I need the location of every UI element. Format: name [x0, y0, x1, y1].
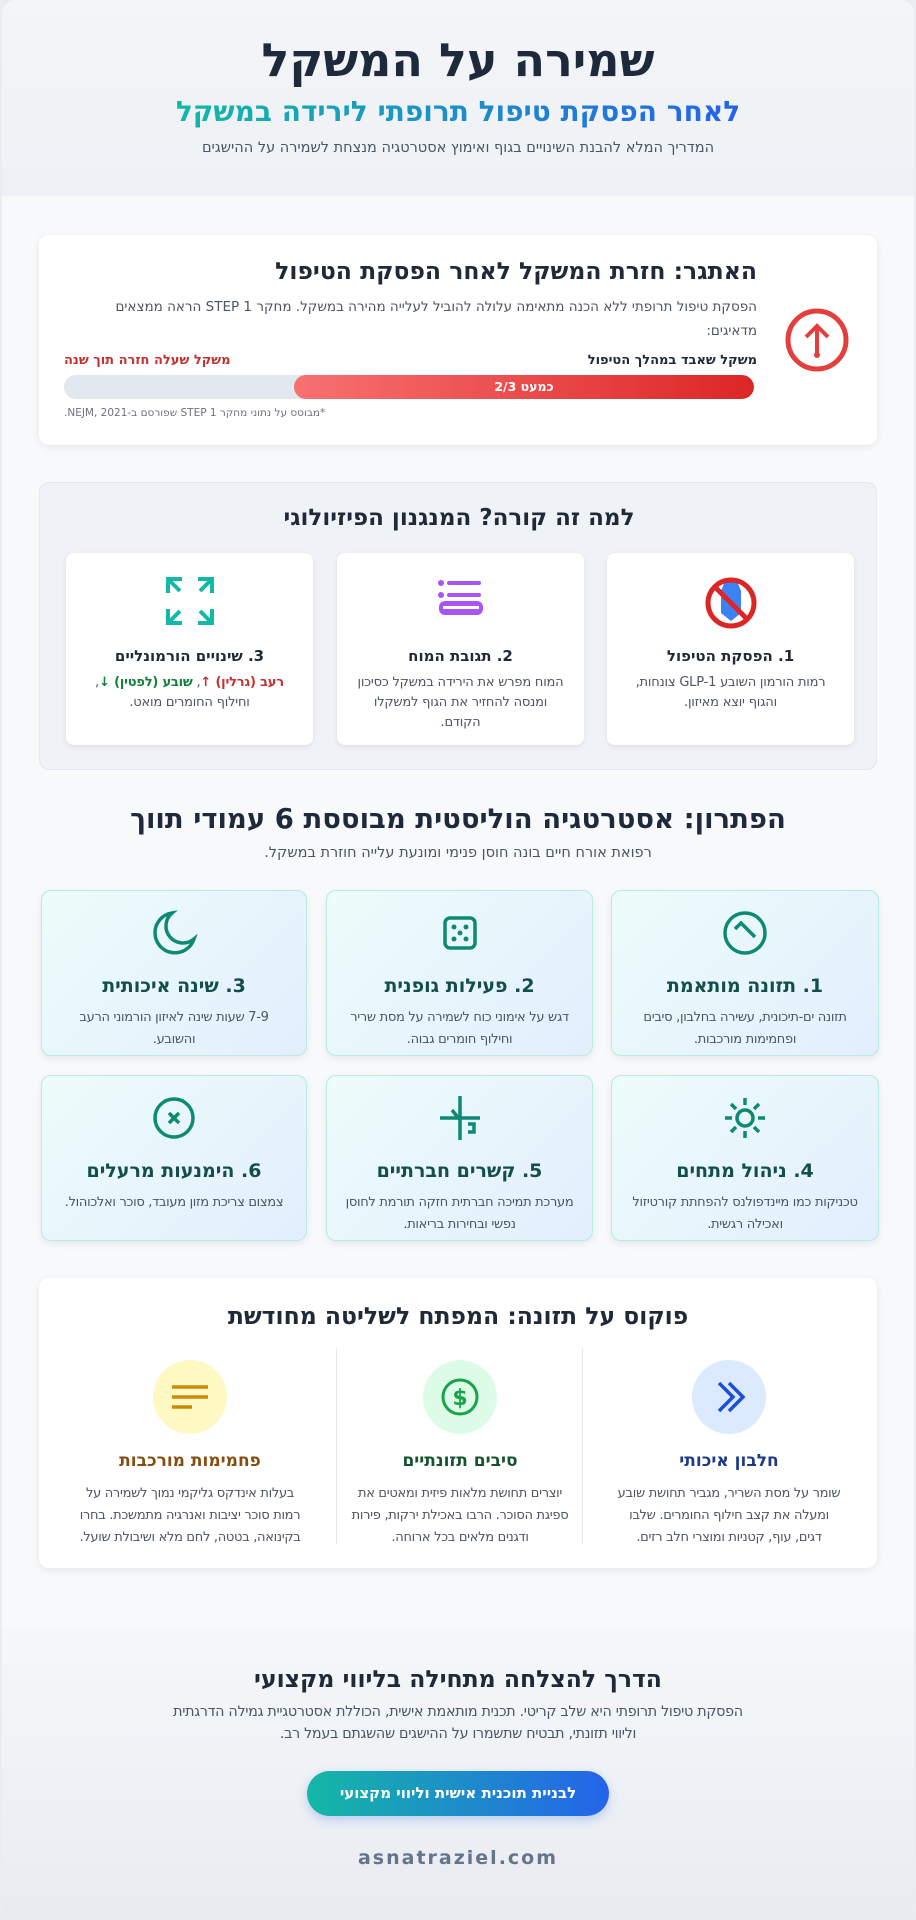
icon: sun — [725, 1098, 765, 1138]
bar labels: משקל שאבד במהלך הטיפול — [588, 353, 757, 368]
card: stop treatment: והגוף יוצא מאיזון. — [684, 695, 777, 710]
column: protein: חלבון איכותי — [679, 1451, 779, 1471]
domain: asnatraziel.com — [358, 1847, 558, 1869]
progress bar — [64, 375, 754, 399]
column: fiber: ודגנים מלאים בכל ארוחה. — [391, 1530, 529, 1545]
column: carbs — [79, 1360, 301, 1545]
card: hormonal changes: וחילוף החומרים מואט. — [129, 695, 250, 710]
pillar 5: מערכת תמיכה חברתית חזקה תורמת לחוסן — [346, 1195, 573, 1210]
icon: cross — [440, 1096, 480, 1140]
footer heading: הדרך להצלחה מתחילה בליווי מקצועי — [254, 1665, 662, 1693]
pillar 3: 3. שינה איכותית — [102, 975, 246, 997]
icon: moon — [153, 910, 198, 954]
header description: המדריך המלא להבנת השינויים בגוף ואימוץ אסטרטגיה מנצחת לשמירה על ההישגים — [202, 140, 714, 156]
pillar 1: ופחמימות מורכבות. — [694, 1032, 796, 1047]
subtitle: לאחר הפסקת טיפול תרופתי לירידה במשקל — [176, 95, 740, 128]
challenge text: הפסקת טיפול תרופתי ללא הכנה מתאימה עלולה להוביל לעלייה מהירה במשקל. מחקר STEP 1 הראה ממצאים מדאיגים: — [115, 299, 757, 339]
column: protein: ומעלה את קצב חילוף החומרים. שלבו — [629, 1508, 829, 1523]
column: carbs: בעלות אינדקס גליקמי נמוך לשמירה על — [86, 1486, 294, 1501]
pillar 2 — [326, 890, 593, 1056]
progress bar: כמעט 2/3 — [494, 379, 554, 394]
card: stop treatment: 1. הפסקת הטיפול — [667, 647, 794, 665]
pillar 5: 5. קשרים חברתיים — [377, 1160, 542, 1182]
pillar 1 — [611, 890, 879, 1056]
icon: list — [438, 580, 483, 615]
panel: mechanism — [39, 482, 877, 770]
card: hormonal changes — [66, 553, 313, 745]
icon: lines — [153, 1360, 227, 1434]
icon: dice — [443, 916, 477, 950]
pillar 4: 4. ניהול מתחים — [676, 1160, 814, 1182]
icon: dollar — [423, 1360, 497, 1434]
column: fiber — [352, 1360, 568, 1545]
card: brain response: הקודם. — [441, 715, 480, 730]
icon: x circle — [153, 1097, 195, 1139]
title: שמירה על המשקל — [262, 33, 654, 87]
pillar 6: 6. הימנעות מרעלים — [86, 1160, 262, 1182]
panel: challenge — [39, 235, 877, 445]
pillar 4 — [611, 1075, 879, 1241]
pillar 3 — [41, 890, 307, 1056]
pillar 2: וחילוף חומרים גבוה. — [407, 1032, 512, 1047]
column: fiber: יוצרים תחושת מלאות פיזית ומאטים את — [358, 1486, 562, 1501]
panel: challenge: משקל שעלה חזרה תוך שנה — [64, 353, 231, 368]
card: brain response: 2. תגובת המוח — [408, 647, 513, 665]
footnote: *מבוסס על נתוני מחקר STEP 1 שפורסם ב-NEJM, 2021. — [64, 407, 325, 419]
column: fiber: סיבים תזונתיים — [402, 1451, 518, 1471]
column: protein: דגים, עוף, קטניות ומוצרי חלב רזים. — [636, 1530, 822, 1545]
solution subtitle: רפואת אורח חיים בונה חוסן פנימי ומונעת עלייה חוזרת במשקל. — [264, 845, 652, 861]
pillar 4: טכניקות כמו מיינדפולנס להפחתת קורטיזול — [632, 1195, 858, 1210]
column: protein: שומר על מסת השריר, מגביר תחושת שובע — [618, 1486, 840, 1501]
card: hormonal changes: רעב (גרלין) ↑, שובע (לפטין) ↓, — [95, 675, 284, 690]
icon: dollar: $ — [452, 1386, 468, 1411]
mechanism heading: למה זה קורה? המנגנון הפיזיולוגי — [283, 505, 634, 531]
header background — [2, 0, 914, 196]
icon: chevrons — [692, 1360, 766, 1434]
pillar 1: 1. תזונה מותאמת — [667, 975, 823, 997]
column: carbs: רמות סוכר יציבות ואנרגיה מתמשכת. בחרו — [80, 1508, 300, 1523]
footer text: וליווי תזונתי, תבטיח שתשמרו על ההישגים שהשגתם בעמל רב. — [280, 1726, 636, 1742]
footer section — [2, 1629, 914, 1918]
footer text: הפסקת טיפול תרופתי היא שלב קריטי. תכנית מותאמת אישית, הכוללת אסטרטגיית גמילה הדרגתית — [173, 1704, 743, 1720]
challenge heading: האתגר: חזרת המשקל לאחר הפסקת הטיפול — [275, 257, 757, 285]
button — [307, 1771, 609, 1816]
pillar 4: ואכילה רגשית. — [707, 1217, 783, 1232]
column: fiber: ספיגת הסוכר. הרבו באכילת ירקות, פירות — [352, 1508, 568, 1523]
icon: up arrow circle — [786, 308, 848, 372]
panel: nutrition — [39, 1278, 877, 1568]
icon: arrows — [166, 577, 214, 625]
icon: no syringe — [706, 578, 756, 628]
pillar 5 — [326, 1075, 593, 1241]
card: brain response — [337, 553, 584, 745]
pillar 5: נפשי ובחירות בריאות. — [403, 1217, 516, 1232]
pillar 3: והשובע. — [153, 1032, 195, 1047]
pillar 6 — [41, 1075, 307, 1241]
pillar 1: תזונה ים-תיכונית, עשירה בחלבון, סיבים — [643, 1010, 847, 1025]
pillar 2: 2. פעילות גופנית — [384, 975, 535, 997]
card: stop treatment — [607, 553, 854, 745]
pillar 2: דגש על אימוני כוח לשמירה על מסת שריר — [350, 1010, 569, 1025]
solution heading: הפתרון: אסטרטגיה הוליסטית מבוססת 6 עמודי תווך — [130, 803, 786, 835]
card: brain response: ומנסה להחזיר את הגוף למשקלו — [374, 695, 547, 710]
pillar 3: 7-9 שעות שינה לאיזון הורמוני הרעב — [79, 1010, 269, 1025]
column: carbs: פחמימות מורכבות — [119, 1451, 261, 1471]
card: stop treatment: רמות הורמון השובע GLP-1 צונחות, — [636, 675, 825, 690]
button: לבניית תוכנית אישית וליווי מקצועי — [340, 1784, 576, 1802]
pillar 6: צמצום צריכת מזון מעובד, סוכר ואלכוהול. — [65, 1195, 283, 1210]
card: brain response: המוח מפרש את הירידה במשקל כסיכון — [358, 675, 563, 690]
card: hormonal changes: 3. שינויים הורמונליים — [115, 647, 264, 665]
nutrition heading: פוקוס על תזונה: המפתח לשליטה מחודשת — [228, 1302, 688, 1330]
footer text — [173, 1704, 743, 1742]
column: protein — [618, 1360, 840, 1545]
column: carbs: בקינואה, בטטה, לחם מלא ושיבולת שועל. — [79, 1530, 301, 1545]
icon: gauge — [723, 911, 767, 955]
